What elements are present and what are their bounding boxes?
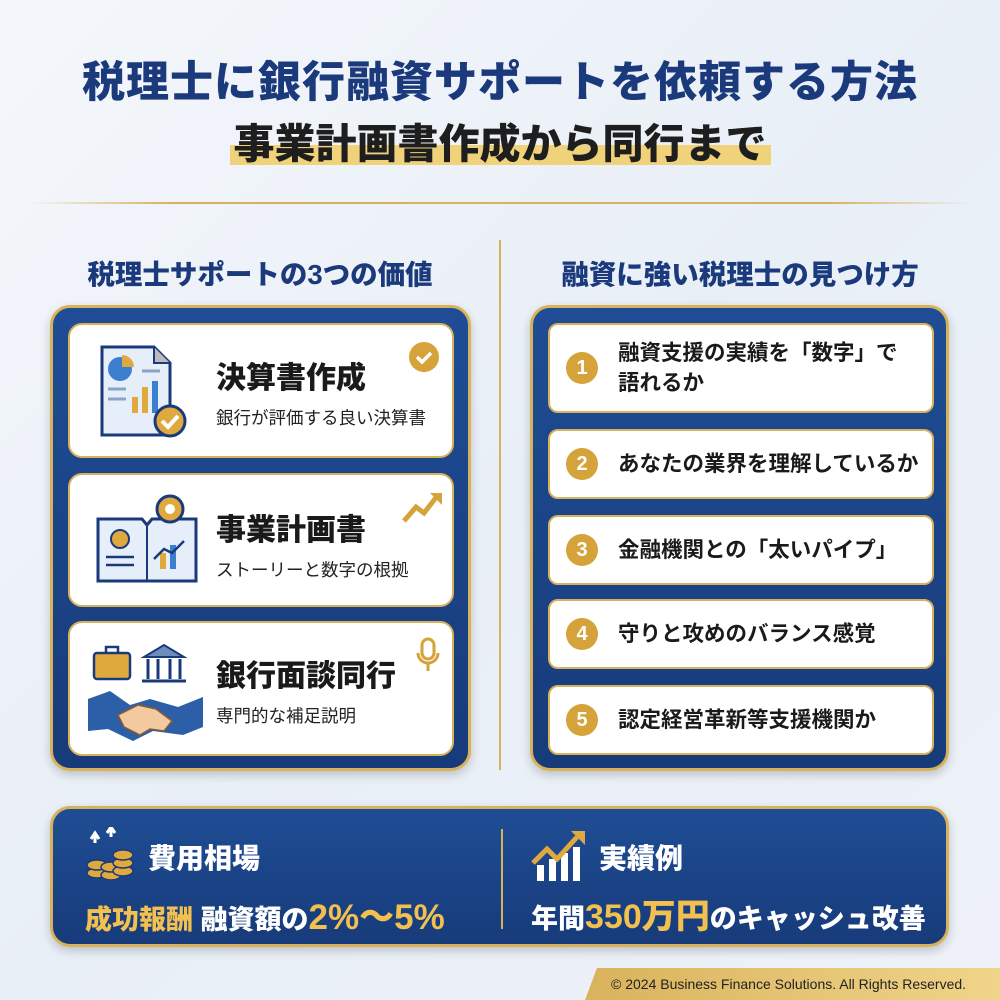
item 5 (548, 685, 934, 755)
icon: microphone (416, 638, 440, 671)
heading: right: 融資に強い税理士の見つけ方 (561, 259, 919, 290)
item 4 (548, 599, 934, 669)
item 2 (548, 429, 934, 499)
item 3 (548, 515, 934, 585)
card: 決算書作成: 決算書作成 (216, 362, 366, 395)
card: 事業計画書: ストーリーと数字の根拠 (216, 560, 408, 580)
card: 決算書作成 (68, 323, 454, 458)
footer (585, 968, 1000, 1000)
footer: © 2024 Business Finance Solutions. All Rights Reserved. (611, 976, 966, 992)
icon: handshake (88, 644, 203, 741)
item 3: 金融機関との「太いパイプ」 (618, 538, 897, 562)
subtitle: 事業計画書作成から同行まで (234, 121, 766, 167)
item 5: 5 (576, 709, 588, 731)
item 5: 認定経営革新等支援機関か (618, 708, 876, 732)
text: result: 年間350万円のキャッシュ改善 (531, 898, 926, 936)
item 1: 融資支援の実績を「数字」で (618, 341, 898, 365)
item 2: 2 (576, 453, 588, 475)
icon: report (100, 346, 186, 438)
item 1: 1 (576, 357, 588, 379)
card: 事業計画書: 事業計画書 (216, 514, 366, 547)
item 1: 語れるか (618, 371, 704, 395)
icon: coins (86, 827, 134, 880)
panel: how to find (530, 305, 949, 771)
heading: left: 税理士サポートの3つの価値 (87, 259, 433, 290)
title: 税理士に銀行融資サポートを依頼する方法 (82, 59, 918, 107)
heading: 費用相場: 費用相場 (148, 843, 260, 874)
card: 銀行面談同行 (68, 621, 454, 756)
card: 銀行面談同行: 専門的な補足説明 (216, 706, 356, 726)
item 2: あなたの業界を理解しているか (618, 452, 918, 476)
item 1 (548, 323, 934, 413)
item 4: 守りと攻めのバランス感覚 (618, 622, 876, 646)
panel: 3 values (50, 305, 471, 771)
icon: plan book (96, 494, 198, 582)
icon: growth chart (531, 831, 585, 881)
panel: bottom summary (50, 806, 949, 947)
card: 銀行面談同行: 銀行面談同行 (216, 660, 396, 693)
card: 事業計画書 (68, 473, 454, 607)
heading: 実績例: 実績例 (599, 843, 683, 874)
card: 決算書作成: 銀行が評価する良い決算書 (216, 408, 426, 428)
icon: trend arrow (402, 493, 442, 523)
item 4: 4 (576, 623, 588, 645)
text: fee: 成功報酬 融資額の2%～5% (85, 898, 445, 937)
item 3: 3 (576, 539, 588, 561)
icon: check badge (409, 342, 439, 372)
